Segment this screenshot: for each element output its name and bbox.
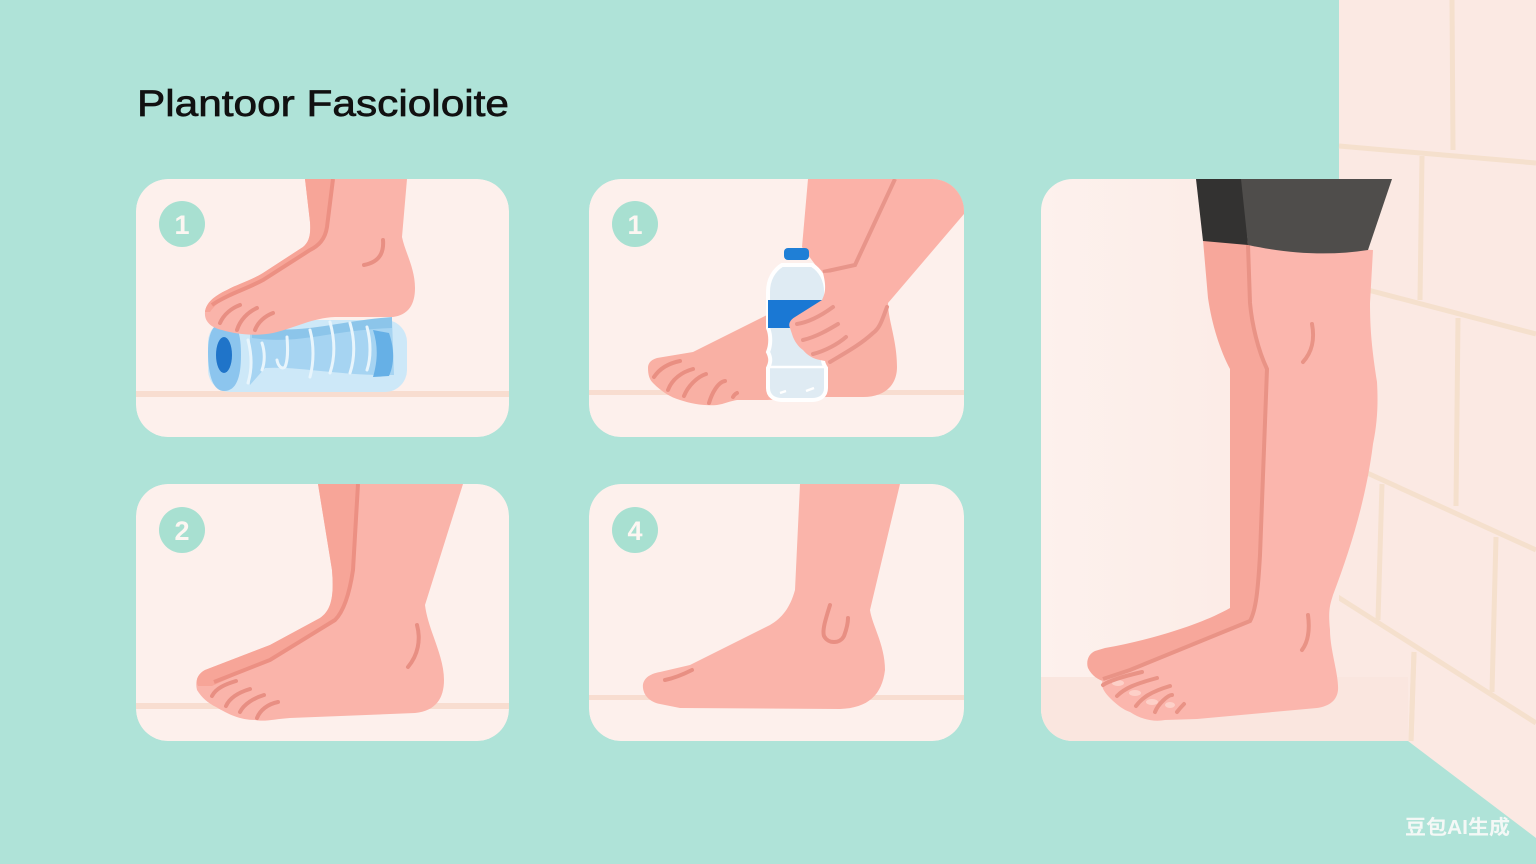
foot [205, 179, 415, 335]
panel: step 1 bottle held at ankle [589, 179, 975, 437]
floor strip [1041, 677, 1408, 741]
panel: step 1 roller under foot [136, 179, 509, 437]
lower leg and forearm [802, 179, 975, 303]
number badge 1: 1 [627, 210, 643, 240]
number badge 4: 4 [627, 516, 643, 546]
number badge 1 [612, 201, 658, 247]
number badge 1: 1 [174, 210, 190, 240]
watermark: 豆包AI生成 [1405, 815, 1510, 839]
foot and heel [648, 303, 897, 406]
panel: standing legs against wall [1041, 179, 1414, 741]
number badge 1 [159, 201, 205, 247]
front leg [1102, 245, 1378, 721]
panel: step 2 foot flat [136, 484, 509, 741]
hand [789, 270, 888, 362]
foot [196, 484, 463, 721]
shorts [1196, 179, 1392, 253]
brick wall [1333, 0, 1536, 838]
number badge 2 [159, 507, 205, 553]
foot [643, 484, 900, 709]
water bottle roller [208, 317, 407, 392]
panel: step 4 foot side view [589, 484, 964, 741]
back leg [1087, 240, 1270, 690]
title: Plantoor Fascioloite [137, 83, 509, 124]
number badge 2: 2 [174, 516, 190, 546]
water bottle [768, 248, 826, 400]
number badge 4 [612, 507, 658, 553]
